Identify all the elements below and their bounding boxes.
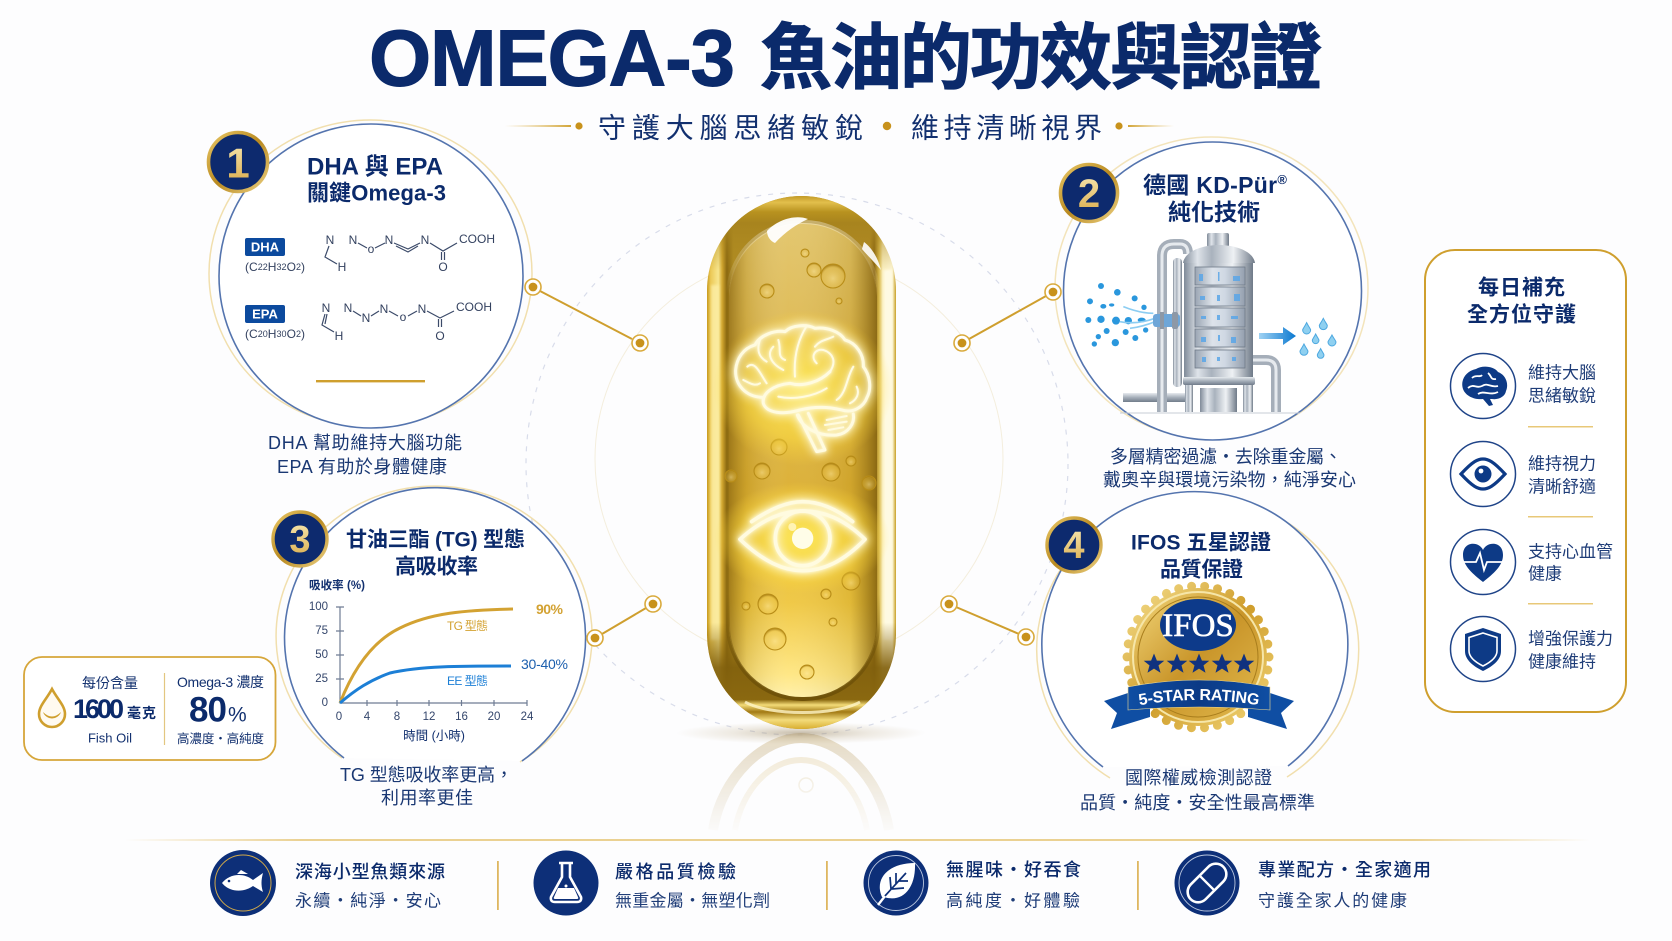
EPA molecule: COOH	[456, 300, 492, 314]
background orbit rings	[526, 193, 1068, 735]
connector: panel 1 to capsule	[525, 279, 648, 351]
DHA tag and formula	[245, 238, 305, 274]
absorption line chart: 0	[322, 697, 328, 709]
item: brain: 思緒敏銳	[1528, 386, 1596, 406]
panel 4 heading: 品質保證	[1160, 558, 1243, 582]
absorption line chart: 16	[455, 711, 468, 723]
stat: 1600 mg: 1600	[73, 694, 124, 724]
title: 魚油的功效與認證	[760, 19, 1322, 99]
EPA molecule	[322, 300, 492, 343]
icon: leaf	[864, 850, 928, 916]
DHA molecule: N	[326, 233, 334, 247]
panel 4 heading	[1131, 530, 1271, 582]
fish oil capsule	[707, 196, 896, 729]
item: shield: 健康維持	[1528, 652, 1596, 672]
absorption line chart: 100	[309, 601, 328, 613]
stat: 1600 mg: Fish Oil	[88, 730, 132, 746]
EPA molecule: N	[418, 302, 426, 316]
feature: family formula: 專業配方・全家適用	[1258, 860, 1431, 880]
feature: no fishy taste: 無腥味・好吞食	[946, 860, 1081, 880]
item: shield: 增強保護力	[1528, 630, 1613, 648]
panel 2 heading	[1143, 172, 1287, 225]
absorption line chart: 50	[315, 649, 328, 661]
absorption line chart: 4	[364, 711, 371, 723]
side panel: daily protection	[1425, 250, 1626, 712]
info box: dosage and concentration	[24, 657, 276, 760]
icon: fish	[210, 850, 276, 916]
connector: panel 4 to capsule	[941, 596, 1034, 645]
stat: 80 percent: 高濃度・高純度	[177, 731, 264, 746]
panel 2 heading: ®	[1277, 172, 1287, 186]
icon: glowing eye	[740, 502, 865, 571]
feature: no fishy taste: 高純度・好體驗	[946, 892, 1080, 910]
stat: 80 percent: %	[228, 704, 247, 726]
panel 3 caption	[340, 765, 513, 808]
DHA molecule: O	[438, 260, 448, 274]
TG curve: TG 型態	[447, 618, 488, 633]
stat: 80 percent	[177, 674, 264, 746]
panel 3 caption: 利用率更佳	[381, 788, 473, 808]
panel 1: DHA and EPA	[208, 120, 532, 428]
DHA molecule: COOH	[459, 232, 495, 246]
side panel heading: 全方位守護	[1467, 302, 1576, 326]
feature: quality testing: 無重金屬・無塑化劑	[615, 892, 770, 910]
DHA tag and formula: DHA	[251, 240, 280, 254]
badge 4	[1047, 518, 1101, 572]
EPA molecule: N	[322, 301, 330, 315]
DHA tag and formula: (C22H32O2)	[245, 260, 305, 274]
item: heart: 支持心血管	[1528, 542, 1613, 562]
panel 1 caption: DHA 幫助維持大腦功能	[268, 433, 462, 453]
icon: glowing brain	[736, 326, 870, 452]
subtitle with gold rules: 維持清晰視界	[911, 112, 1102, 144]
absorption line chart: 時間 (小時)	[403, 729, 465, 743]
badge 2	[1060, 164, 1118, 222]
feature: fish source	[210, 850, 445, 916]
feature: family formula: 守護全家人的健康	[1258, 892, 1407, 910]
stat: 80 percent: Omega-3 濃度	[177, 674, 264, 690]
panel 4 caption: 品質・純度・安全性最高標準	[1080, 793, 1315, 813]
panel 3 heading: 甘油三酯 (TG) 型態	[346, 528, 525, 552]
bubbles	[725, 249, 876, 679]
capsule shadow	[676, 722, 926, 744]
icon: capsule pill	[1174, 850, 1240, 916]
feature: no fishy taste	[864, 850, 1081, 916]
panel 2 heading: 德國 KD-Pür	[1143, 172, 1277, 198]
panel 4 caption: 國際權威檢測認證	[1125, 768, 1272, 788]
badge 4: 4	[1063, 525, 1085, 567]
absorption line chart: 24	[521, 711, 534, 723]
panel 2: KD-Pur purification	[1055, 137, 1368, 440]
feature: family formula	[1174, 850, 1431, 916]
item: shield	[1450, 616, 1613, 682]
feature: fish source: 深海小型魚類來源	[295, 862, 445, 882]
panel 4 heading: IFOS 五星認證	[1131, 530, 1271, 554]
panel 3 heading: 高吸收率	[395, 554, 478, 578]
stat: 1600 mg	[73, 675, 156, 746]
feature: quality testing: 嚴格品質檢驗	[615, 861, 736, 882]
item: eye: 維持視力	[1528, 454, 1596, 474]
item: eye: 清晰舒適	[1528, 478, 1596, 496]
EPA molecule: o	[400, 310, 407, 324]
DHA molecule: N	[349, 233, 357, 247]
item: heart	[1450, 530, 1613, 594]
side panel heading: 每日補充	[1478, 276, 1565, 300]
absorption line chart: 8	[394, 711, 400, 723]
EE curve	[340, 656, 568, 703]
panel 4: IFOS certification	[1036, 490, 1360, 778]
EE curve: EE 型態	[447, 673, 488, 688]
TG curve	[340, 601, 564, 703]
panel 4 caption	[1080, 768, 1315, 813]
icon: flask	[534, 850, 598, 916]
EPA molecule: N	[344, 301, 352, 315]
panel 3 heading	[346, 528, 525, 578]
panel 1 heading: 關鍵Omega-3	[307, 180, 446, 206]
TG curve: 90%	[536, 601, 564, 617]
absorption line chart: 25	[315, 673, 328, 685]
spray of blue impurity dots	[1085, 283, 1155, 347]
panel 3: TG form absorption	[273, 486, 592, 762]
icon: oil drop	[39, 689, 65, 727]
EPA tag and formula: EPA	[252, 306, 278, 322]
ribbon: 5-STAR RATING	[1138, 689, 1259, 705]
DHA molecule: N	[421, 233, 429, 247]
feature: quality testing	[534, 850, 770, 916]
EPA molecule: H	[335, 329, 343, 343]
badge 1: 1	[226, 140, 250, 186]
DHA molecule: o	[368, 242, 375, 256]
clean droplets	[1300, 318, 1336, 358]
panel 2 heading: 純化技術	[1168, 199, 1260, 225]
EPA molecule: O	[435, 329, 445, 343]
absorption line chart: 吸收率 (%)	[309, 578, 365, 592]
absorption line chart: 20	[488, 711, 500, 723]
DHA molecule: N	[385, 233, 393, 247]
capsule highlights	[767, 217, 881, 270]
title: OMEGA-3	[369, 14, 735, 102]
panel 2 caption	[1103, 447, 1356, 490]
stat: 80 percent: 80	[189, 690, 227, 730]
absorption line chart: 75	[315, 625, 328, 637]
stat: 1600 mg: 毫克	[127, 705, 156, 721]
purification tank	[1120, 233, 1300, 413]
absorption line chart: 12	[423, 711, 435, 723]
panel 3 caption: TG 型態吸收率更高，	[340, 765, 513, 785]
title	[369, 14, 1322, 102]
item: eye	[1450, 442, 1596, 506]
EPA tag and formula: (C20H30O2)	[245, 327, 305, 341]
panel 2 caption: 多層精密過濾・去除重金屬、	[1110, 447, 1342, 467]
badge 1	[208, 132, 268, 192]
panel 1 caption: EPA 有助於身體健康	[277, 457, 447, 477]
item: heart: 健康	[1528, 564, 1562, 584]
EPA molecule: N	[380, 302, 388, 316]
subtitle with gold rules	[505, 112, 1174, 144]
IFOS 5-star seal: IFOS	[1162, 608, 1234, 644]
DHA molecule	[325, 232, 495, 274]
panel 1 heading: DHA 與 EPA	[307, 154, 443, 180]
DHA molecule: H	[338, 260, 346, 274]
badge 3	[273, 512, 327, 566]
absorption line chart	[309, 578, 568, 743]
panel 1 caption	[268, 433, 462, 477]
badge 3: 3	[289, 519, 311, 561]
arrow: filtered output	[1259, 327, 1296, 345]
stat: 1600 mg: 每份含量	[82, 675, 138, 691]
feature: fish source: 永續・純淨・安心	[295, 892, 441, 910]
absorption line chart: 0	[336, 711, 342, 723]
EPA tag and formula	[245, 305, 305, 341]
EE curve: 30-40%	[521, 656, 568, 672]
panel 2 caption: 戴奧辛與環境污染物，純淨安心	[1103, 470, 1356, 490]
panel 1 heading	[307, 154, 446, 206]
badge 2: 2	[1078, 172, 1100, 216]
connector: panel 3 to capsule	[587, 596, 661, 646]
IFOS 5-star seal	[1104, 582, 1294, 732]
side panel heading	[1467, 276, 1576, 326]
capsule reflection	[713, 738, 889, 830]
subtitle with gold rules: 守護大腦思緒敏銳	[598, 112, 863, 144]
ribbon	[1104, 680, 1294, 729]
item: brain	[1450, 354, 1596, 418]
connector: panel 2 to capsule	[954, 284, 1061, 351]
EPA molecule: N	[362, 311, 370, 325]
item: brain: 維持大腦	[1528, 364, 1596, 382]
